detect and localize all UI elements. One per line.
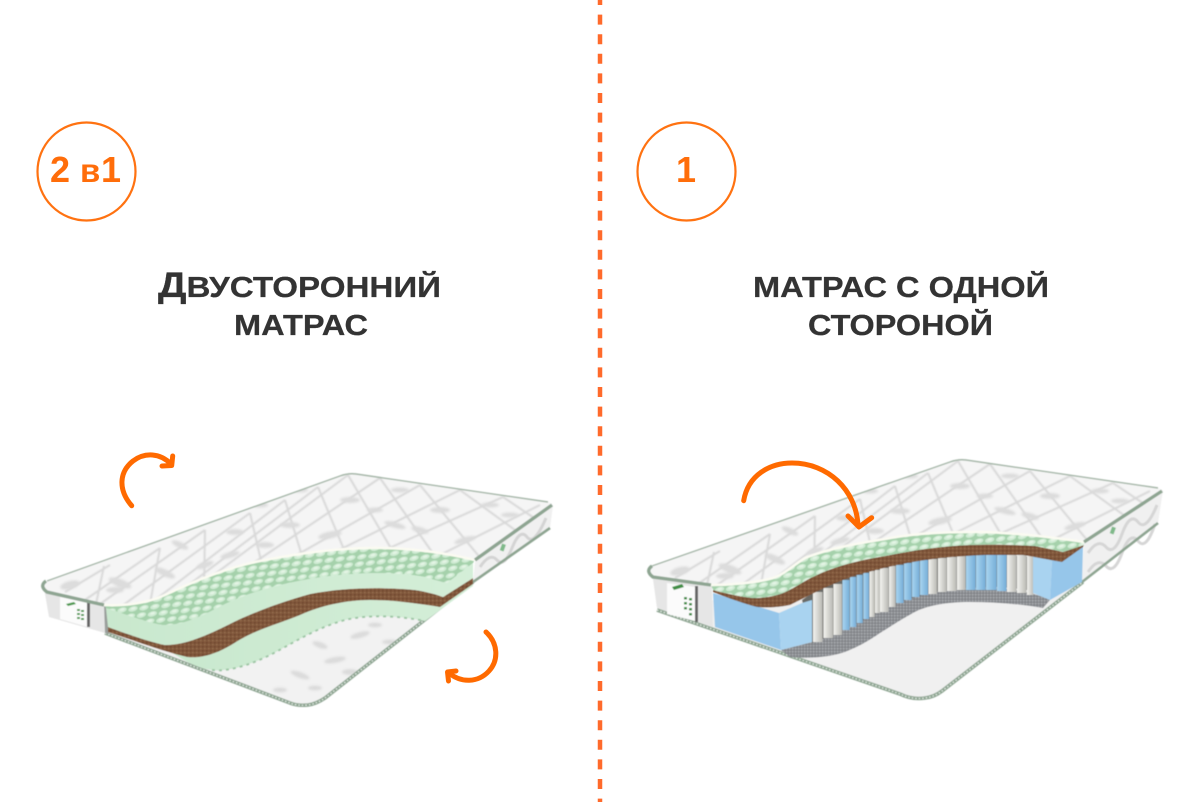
heading: left: МАТРАС bbox=[234, 310, 368, 342]
dark backing bbox=[802, 554, 1040, 643]
quilted top bbox=[42, 474, 553, 606]
mattress: double-sided bbox=[42, 474, 553, 705]
arrow: left top rotation bbox=[122, 455, 173, 506]
felt layer bbox=[781, 587, 1050, 658]
egg-crate foam surface bbox=[104, 548, 475, 625]
side panel with label bbox=[652, 572, 713, 627]
lower foam layer bbox=[165, 584, 473, 670]
heading: left bbox=[158, 266, 441, 342]
quilted top bbox=[648, 460, 1163, 592]
side panel right bbox=[1082, 490, 1163, 582]
arrow: flip over bbox=[744, 463, 872, 527]
coconut layer bbox=[713, 545, 1084, 607]
heading: right: СТОРОНОЙ bbox=[808, 308, 993, 342]
egg-crate foam bbox=[711, 532, 1084, 598]
upper foam face bbox=[106, 563, 473, 645]
side panel right bbox=[473, 505, 553, 582]
badge: 2 в 1 bbox=[38, 122, 136, 220]
bottom panel bbox=[657, 549, 1083, 698]
mattress: single-sided bbox=[648, 460, 1163, 698]
dashed divider bbox=[598, 0, 602, 802]
badge: 2 в 1: 2 bbox=[50, 149, 70, 190]
heading: right: МАТРАС С ОДНОЙ bbox=[753, 270, 1049, 304]
heading: right bbox=[753, 270, 1049, 342]
badge: 2 в 1: в bbox=[80, 152, 100, 189]
blue foam block: front bbox=[713, 593, 812, 650]
blue foam block: back bbox=[1033, 547, 1083, 600]
badge: 1: 1 bbox=[676, 149, 696, 190]
side panel with label bbox=[44, 588, 109, 634]
badge: 2 в 1: 1 bbox=[101, 149, 121, 190]
badge: 1 bbox=[638, 122, 736, 220]
bottom panel bbox=[105, 570, 473, 705]
arrow: left bottom rotation bbox=[448, 632, 496, 681]
coconut layer bbox=[108, 578, 473, 657]
pocket springs bbox=[813, 555, 1034, 642]
heading: left: ДВУСТОРОННИЙ bbox=[158, 266, 441, 305]
